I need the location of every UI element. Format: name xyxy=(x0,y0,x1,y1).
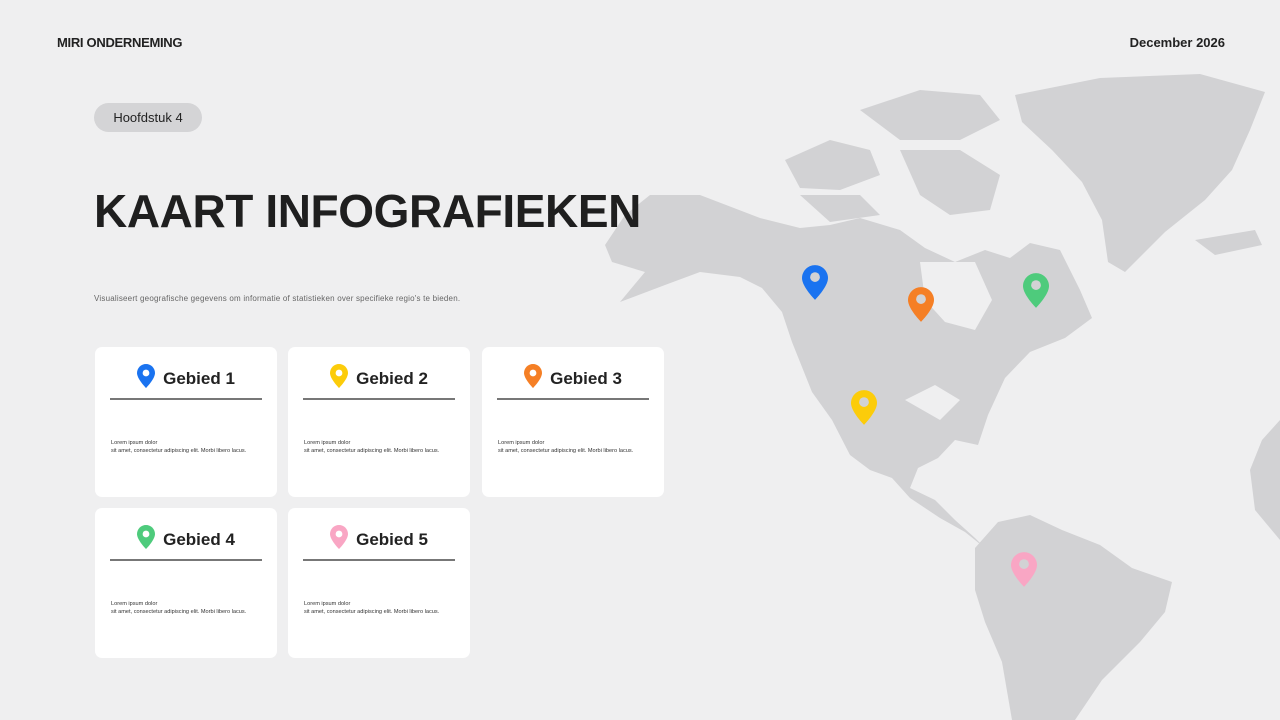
title: KAART INFOGRAFIEKEN xyxy=(94,185,641,237)
card: Gebied 4: Gebied 4 xyxy=(163,530,235,549)
card: Gebied 3: Gebied 3 xyxy=(550,369,622,388)
card: Gebied 1: sit amet, consectetur adipiscing elit. Morbi libero lacus. xyxy=(111,448,246,454)
card: Gebied 3: sit amet, consectetur adipiscing elit. Morbi libero lacus. xyxy=(498,448,633,454)
map pin: green xyxy=(1023,273,1049,308)
card: Gebied 2: sit amet, consectetur adipiscing elit. Morbi libero lacus. xyxy=(304,448,439,454)
card: Gebied 4: sit amet, consectetur adipiscing elit. Morbi libero lacus. xyxy=(111,609,246,615)
card: Gebied 5: Lorem ipsum dolor xyxy=(304,601,350,607)
africa edge xyxy=(1250,420,1280,540)
card: Gebied 1: Gebied 1 xyxy=(163,369,235,388)
map pin: blue xyxy=(802,265,828,300)
south america xyxy=(975,515,1172,720)
subtitle: Visualiseert geografische gegevens om informatie of statistieken over specifieke regio's te bieden. xyxy=(94,294,460,303)
map pin: orange xyxy=(908,287,934,322)
north america xyxy=(605,195,1092,548)
card: Gebied 3: Lorem ipsum dolor xyxy=(498,440,544,446)
greenland xyxy=(1015,74,1265,272)
card: Gebied 5: Gebied 5 xyxy=(356,530,428,549)
card: Gebied 3 xyxy=(482,347,664,497)
arctic islands xyxy=(785,140,880,190)
card: Gebied 2: Lorem ipsum dolor xyxy=(304,440,350,446)
card: Gebied 5: sit amet, consectetur adipiscing elit. Morbi libero lacus. xyxy=(304,609,439,615)
card: Gebied 5 xyxy=(288,508,470,658)
map pin: yellow xyxy=(851,390,877,425)
header: company: MIRI ONDERNEMING xyxy=(57,35,182,50)
chapter badge xyxy=(94,103,202,132)
header: date: December 2026 xyxy=(1130,35,1225,50)
map pin: pink xyxy=(1011,552,1037,587)
chapter badge: Hoofdstuk 4 xyxy=(113,110,183,125)
card: Gebied 1: Lorem ipsum dolor xyxy=(111,440,157,446)
card: Gebied 4: Lorem ipsum dolor xyxy=(111,601,157,607)
card: Gebied 2 xyxy=(288,347,470,497)
card: Gebied 1 xyxy=(95,347,277,497)
card: Gebied 4 xyxy=(95,508,277,658)
card: Gebied 2: Gebied 2 xyxy=(356,369,428,388)
